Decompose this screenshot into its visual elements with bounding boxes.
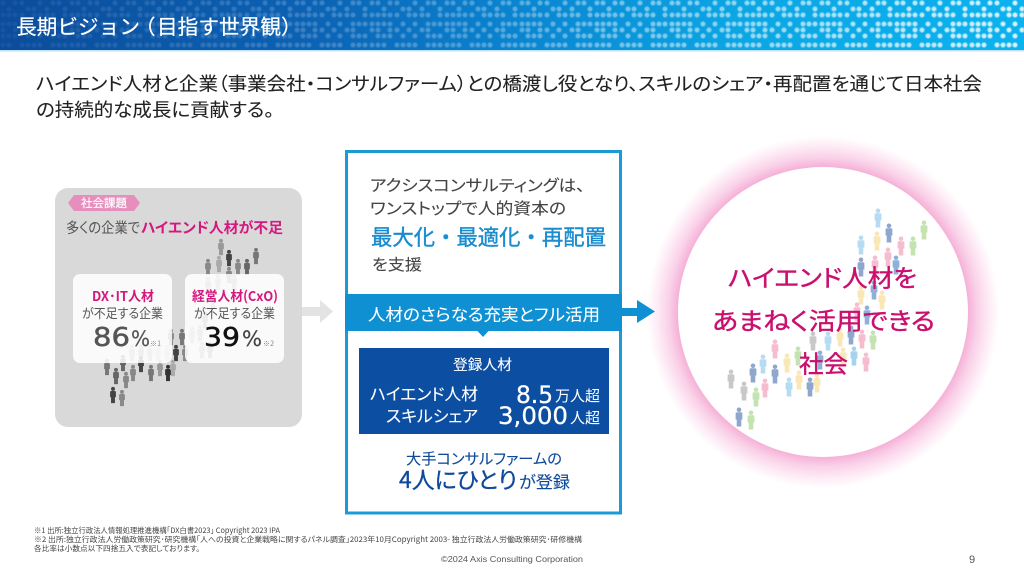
tag: social issue: 社会課題	[81, 195, 127, 211]
heading: shortage: ハイエンド人材が不足	[141, 217, 283, 238]
footnotes	[34, 525, 583, 554]
card: CxO talent	[185, 274, 284, 363]
title: ）	[281, 10, 302, 40]
vision text: 社会	[799, 344, 848, 380]
vision circle	[647, 136, 999, 488]
coloured people	[728, 208, 927, 430]
card: CxO talent: %	[242, 327, 262, 351]
card: CxO talent: が不足する企業	[194, 303, 275, 322]
title: 目指す世界観	[157, 10, 281, 40]
tag: social issue	[68, 195, 140, 211]
band: talent utilisation: 人材のさらなる充実とフル活用	[368, 302, 600, 326]
card: DX/IT talent: 86	[93, 323, 130, 353]
one in four callout: 大手コンサルファームの	[406, 448, 562, 469]
vision text: あまねく活用できる	[712, 302, 935, 336]
panel: social issue	[55, 188, 302, 427]
vision text	[712, 258, 935, 380]
support text	[370, 172, 606, 275]
card: DX/IT talent: ※1	[150, 339, 161, 349]
card: CxO talent: 経営人材(CxO)	[192, 285, 278, 305]
card: DX/IT talent: %	[131, 327, 150, 351]
registered talent box: スキルシェア	[386, 403, 478, 427]
registered talent box	[359, 348, 609, 434]
heading: shortage: 多くの企業で	[66, 217, 140, 238]
card: DX/IT talent	[73, 274, 172, 363]
arrow: blue	[622, 300, 655, 323]
arrow: grey	[302, 300, 333, 323]
lead text: の持続的な成長に貢献する。	[36, 96, 274, 122]
support text: アクシスコンサルティングは、	[370, 172, 585, 196]
panel: Axis support	[345, 152, 622, 513]
footnotes: ※2 出所:独立行政法人労働政策研究･研究機構｢人への投資と企業戦略に関するパネル調査｣2023年10月Copyright 2003- 独立行政法人労働政策研究･研修機構	[34, 534, 583, 545]
title: 長期ビジョン	[16, 10, 140, 40]
registered talent box: ハイエンド人材	[370, 381, 478, 405]
registered talent box: 3,000	[498, 402, 568, 430]
card: CxO talent: ※2	[263, 339, 274, 349]
support text: ワンストップで人的資本の	[370, 195, 566, 219]
one in four callout: が登録	[519, 469, 571, 493]
vision text: ハイエンド人材を	[728, 258, 917, 294]
header band	[0, 0, 1024, 52]
lead text: ハイエンド人材と企業（事業会社・コンサルファーム）との橋渡し役となり、スキルのシェア・再配置を通じて日本社会	[36, 70, 982, 96]
registered talent box: 8.5	[516, 381, 553, 409]
page number: 9	[969, 554, 975, 566]
one in four callout	[399, 448, 571, 495]
support text: 最大化・最適化・再配置	[371, 221, 606, 252]
card: CxO talent: 39	[204, 323, 240, 353]
lead text	[36, 70, 982, 122]
support text: を支援	[372, 253, 423, 275]
registered talent box: 人超	[570, 407, 600, 428]
band: talent utilisation	[345, 294, 622, 337]
title: （	[135, 10, 156, 40]
one in four callout: 4人にひとり	[399, 461, 517, 495]
footnotes: 各比率は小数点以下四捨五入で表記しております。	[34, 543, 200, 554]
registered talent box: 万人超	[555, 385, 600, 406]
card: DX/IT talent: が不足する企業	[82, 303, 163, 322]
people crowd	[104, 239, 259, 406]
registered talent box: 登録人材	[453, 354, 512, 375]
copyright: ©2024 Axis Consulting Corporation	[441, 554, 583, 564]
footnotes: ※1 出所:独立行政法人情報処理推進機構｢DX白書2023｣ Copyright 2023 IPA	[34, 525, 280, 536]
card: DX/IT talent: DX･IT人材	[92, 285, 154, 305]
